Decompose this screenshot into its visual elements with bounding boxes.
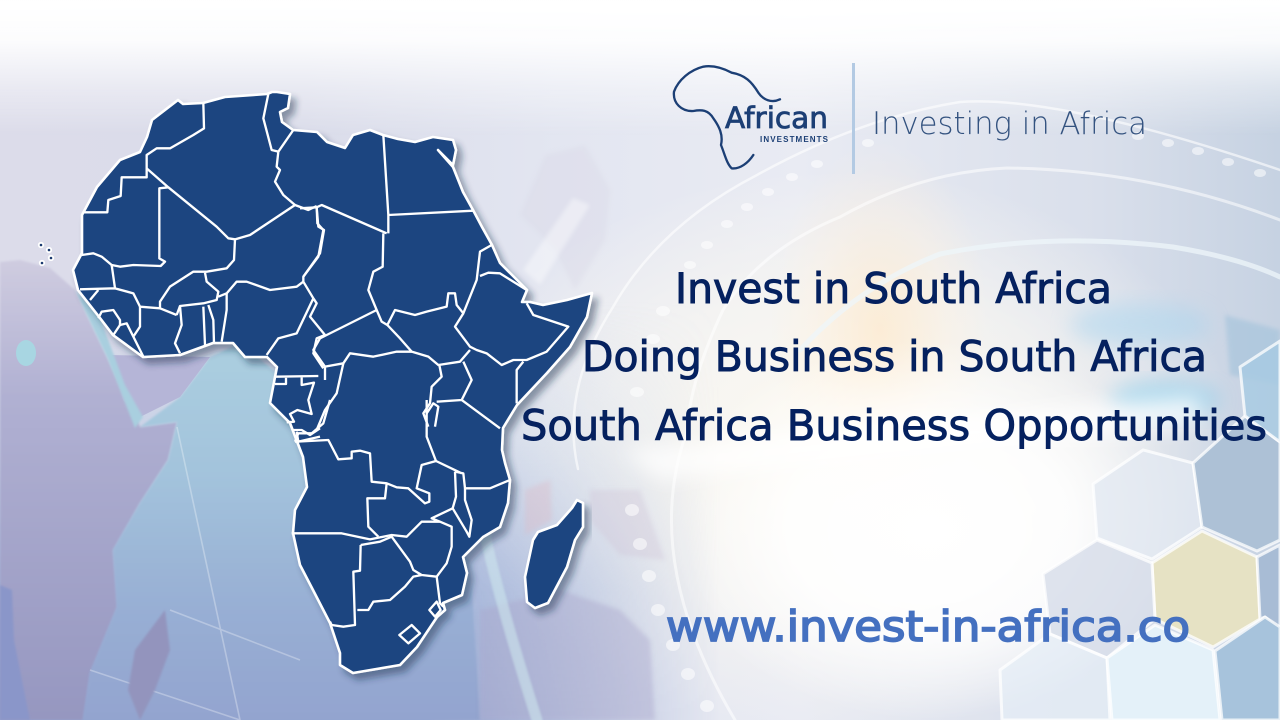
top white fade — [0, 0, 1280, 135]
map: Madagascar — [525, 500, 583, 608]
background decoration: pale coastal strip — [75, 290, 143, 428]
icon: small pale circle at left edge — [16, 340, 36, 366]
map: Gabon and Congo coast borders — [275, 376, 320, 442]
logo divider — [852, 63, 855, 174]
map of Africa — [39, 92, 592, 673]
background decoration: hexagons — [1000, 341, 1280, 720]
background decoration: thin ocean lines — [90, 427, 300, 720]
map: southern borders — [292, 400, 510, 643]
background decoration: light rays — [523, 198, 1200, 480]
logo subline: INVESTMENTS — [760, 135, 829, 144]
background decoration: dotted ring — [625, 132, 1266, 712]
map: Canary Islands — [39, 243, 53, 265]
background decoration: west Atlantic landmass — [0, 260, 177, 720]
background lower-left tint — [0, 379, 694, 720]
background decoration: pale mauve bay — [110, 355, 210, 417]
website URL: www.invest-in-africa.co — [666, 602, 1190, 651]
tagline: Investing in Africa — [872, 106, 1147, 142]
map: mainland silhouette — [73, 92, 592, 673]
headline 1: Invest in South Africa — [675, 264, 1112, 313]
background decoration: dark island — [128, 610, 170, 720]
icon: Africa outline — [674, 66, 780, 168]
background decoration: lower-left blue patch — [0, 585, 30, 720]
logo wordmark: African — [725, 101, 828, 135]
headline stack — [521, 264, 1267, 450]
logo — [674, 66, 829, 168]
headline 2: Doing Business in South Africa — [582, 332, 1207, 381]
background decoration: globe and map on the right — [1070, 303, 1280, 418]
background decoration: ocean band — [83, 343, 480, 720]
background decoration: concentric rings — [481, 101, 1280, 720]
background decoration: faint eastern landmasses — [480, 145, 665, 720]
map: western and northern borders — [80, 94, 325, 368]
map: eastern and central borders — [300, 135, 568, 430]
headline 3: South Africa Business Opportunities — [521, 401, 1267, 450]
